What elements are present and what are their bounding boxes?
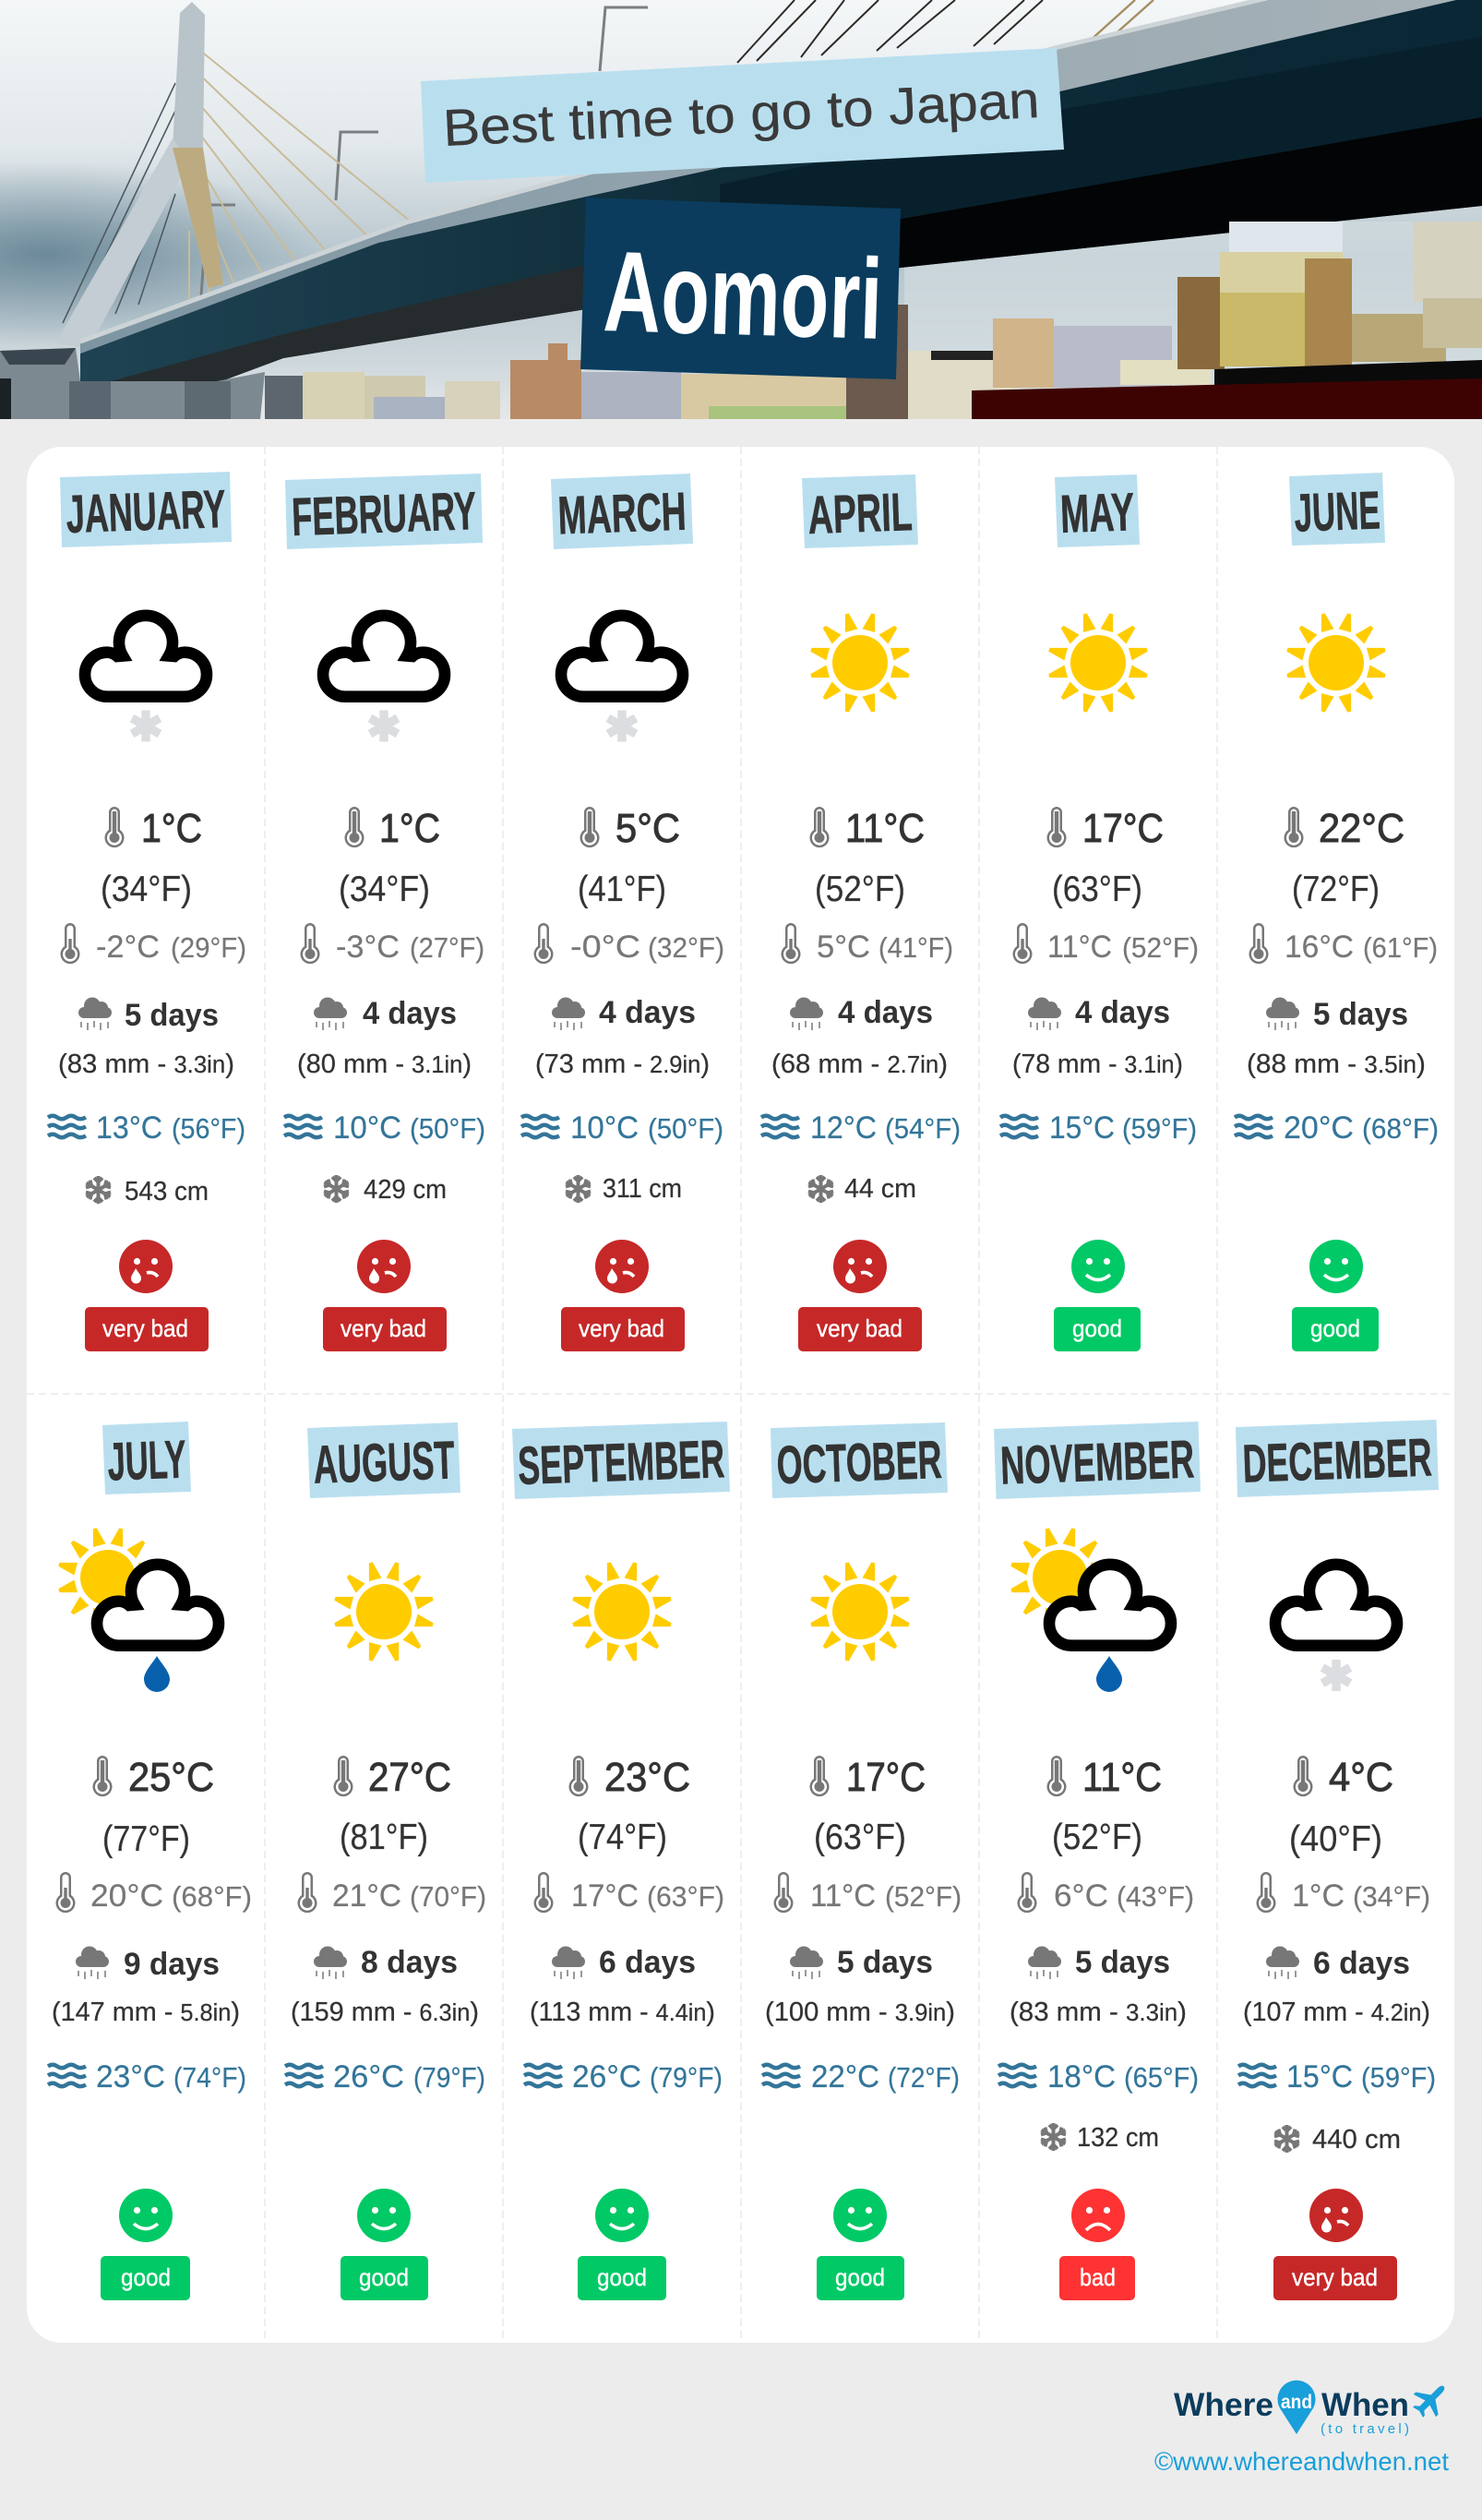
sea temperature (761, 1110, 961, 1146)
average low temperature: 1°C (1292, 1878, 1345, 1914)
sea temperature: (72°F) (888, 2061, 960, 2094)
rainfall: (100 mm - 3.9in) (765, 1998, 955, 2027)
icon: sun (809, 1561, 911, 1662)
sea temperature (284, 1110, 485, 1146)
average low temperature: 11°C (810, 1878, 876, 1914)
heading: July (102, 1422, 191, 1494)
icon: sun (333, 1561, 435, 1662)
average high temperature: (63°F) (1052, 870, 1142, 909)
rainfall (52, 1946, 240, 2027)
city name banner (580, 198, 901, 379)
heading: January (60, 472, 232, 547)
average high temperature: 1°C (379, 806, 440, 851)
heading: May: MAY (1059, 482, 1135, 545)
average high temperature: 11°C (1082, 1755, 1162, 1800)
sea temperature: 10°C (570, 1110, 639, 1146)
average low temperature (533, 923, 724, 965)
sea temperature (1238, 2059, 1436, 2094)
average low temperature (1013, 923, 1199, 965)
average low temperature: -3°C (336, 930, 400, 965)
snowfall (564, 1174, 682, 1204)
sea temperature: (59°F) (1122, 1112, 1197, 1145)
heading: August: AUGUST (312, 1430, 456, 1495)
average high temperature (92, 1755, 214, 1859)
rainfall (1010, 1945, 1187, 2027)
average high temperature (1285, 806, 1404, 909)
rainfall: (113 mm - 4.4in) (530, 1998, 715, 2027)
heading: June: JUNE (1293, 480, 1381, 544)
average high temperature (101, 806, 202, 909)
average low temperature: 21°C (332, 1878, 401, 1914)
rainfall: (80 mm - 3.1in) (297, 1050, 472, 1079)
heading: June (1289, 473, 1385, 546)
average low temperature: (61°F) (1363, 931, 1438, 964)
heading: March (551, 474, 693, 549)
average low temperature: 20°C (90, 1878, 163, 1914)
sea temperature: 23°C (96, 2059, 165, 2094)
average low temperature: (63°F) (647, 1880, 724, 1913)
sea temperature: 20°C (1284, 1110, 1354, 1146)
rainfall: (68 mm - 2.7in) (771, 1050, 948, 1079)
average low temperature: -0°C (570, 930, 640, 965)
rating: very bad: very bad (817, 1314, 902, 1342)
rainfall: (159 mm - 6.3in) (291, 1998, 479, 2027)
snowfall: 429 cm (364, 1175, 447, 1205)
average low temperature: (68°F) (172, 1880, 252, 1913)
icon: cloud with snow (1275, 1565, 1397, 1691)
average low temperature (781, 923, 953, 965)
average high temperature: (77°F) (102, 1819, 190, 1859)
snowfall (1273, 2125, 1401, 2154)
average low temperature: 16°C (1285, 930, 1354, 965)
snowfall: 543 cm (125, 1177, 209, 1206)
rating: good: good (1310, 1314, 1360, 1342)
average high temperature: (63°F) (814, 1818, 906, 1857)
rainfall (771, 995, 948, 1079)
average low temperature: (27°F) (410, 931, 484, 964)
average low temperature (533, 1872, 724, 1914)
rainfall (765, 1945, 955, 2027)
rainfall (530, 1945, 715, 2027)
panel: September (512, 1422, 730, 2300)
heading: September (512, 1422, 730, 1499)
average high temperature: (40°F) (1289, 1819, 1382, 1859)
rating: good: good (121, 2263, 171, 2291)
rainfall: (78 mm - 3.1in) (1012, 1050, 1183, 1079)
rainfall: (73 mm - 2.9in) (535, 1050, 710, 1079)
average high temperature (1289, 1755, 1393, 1859)
average low temperature (301, 923, 484, 965)
average high temperature: (74°F) (578, 1818, 667, 1857)
panel: July (48, 1422, 252, 2300)
icon: map pin with "and": and (1281, 2392, 1312, 2413)
rating: very bad (798, 1240, 922, 1351)
rainfall: 4 days (363, 996, 457, 1031)
sea temperature: (65°F) (1124, 2061, 1199, 2094)
rating: very bad (85, 1240, 209, 1351)
sea temperature (521, 1110, 723, 1146)
rating: very bad: very bad (102, 1314, 188, 1342)
average low temperature (55, 1872, 252, 1914)
icon: airplane (1406, 2375, 1455, 2424)
average high temperature: (81°F) (340, 1818, 428, 1857)
average low temperature: (52°F) (1122, 931, 1199, 964)
average low temperature: (41°F) (878, 931, 953, 964)
rating: good (578, 2189, 666, 2300)
average high temperature (1046, 1755, 1162, 1857)
average low temperature: (52°F) (885, 1880, 962, 1913)
sea temperature: (56°F) (172, 1112, 245, 1145)
panel: April (761, 474, 961, 1351)
average high temperature: (72°F) (1292, 870, 1380, 909)
panel: August (285, 1422, 486, 2300)
average high temperature: (34°F) (101, 870, 192, 909)
panel: February (284, 474, 485, 1351)
rainfall (58, 997, 234, 1079)
average low temperature: (32°F) (648, 931, 724, 964)
average high temperature: 22°C (1319, 806, 1404, 851)
icon: cloud with snow (323, 616, 445, 742)
average low temperature (61, 923, 246, 965)
sea temperature (1235, 1110, 1439, 1146)
rating: very bad: very bad (579, 1314, 664, 1342)
footer logo: Where and When: When (1321, 2387, 1409, 2423)
average high temperature: 1°C (141, 806, 202, 851)
sea temperature: (79°F) (650, 2061, 723, 2094)
panel: December (1236, 1420, 1439, 2300)
icon: map pin with "and" (1277, 2381, 1316, 2434)
rainfall: 5 days (1313, 997, 1408, 1032)
heading: September: SEPTEMBER (517, 1429, 725, 1496)
rating: very bad (561, 1240, 685, 1351)
average low temperature: (29°F) (171, 931, 246, 964)
sea temperature: (74°F) (173, 2061, 246, 2094)
rainfall: 6 days (599, 1945, 696, 1980)
icon: cloud with snow (561, 616, 683, 742)
sea temperature (285, 2059, 485, 2094)
average high temperature: 11°C (845, 806, 925, 851)
header photo: Aomori bay bridge and city (0, 0, 1482, 419)
rating: good: good (359, 2263, 409, 2291)
average high temperature: (41°F) (578, 870, 666, 909)
average high temperature: 17°C (846, 1755, 926, 1800)
icon: sun (1047, 612, 1149, 714)
average high temperature: 4°C (1329, 1755, 1393, 1800)
snowfall (807, 1174, 916, 1204)
rainfall (297, 996, 472, 1079)
rating: very bad: very bad (1292, 2263, 1378, 2291)
rating: bad: bad (1080, 2263, 1116, 2291)
sea temperature: 12°C (810, 1110, 877, 1146)
rainfall (535, 995, 710, 1079)
panel: October (762, 1422, 962, 2300)
heading: November: NOVEMBER (999, 1429, 1195, 1496)
sea temperature (998, 2059, 1199, 2094)
sea temperature (1000, 1110, 1197, 1146)
sea temperature: (54°F) (885, 1112, 961, 1145)
average high temperature (568, 1755, 690, 1857)
average high temperature: 5°C (616, 806, 680, 851)
average high temperature: 17°C (1082, 806, 1164, 851)
average high temperature: (34°F) (339, 870, 430, 909)
sea temperature: 15°C (1286, 2059, 1353, 2094)
title banner (421, 48, 1064, 183)
sea temperature: 15°C (1049, 1110, 1115, 1146)
average low temperature (1257, 1872, 1430, 1914)
panel: November (994, 1422, 1201, 2300)
average low temperature (1249, 923, 1438, 965)
average high temperature: 25°C (128, 1755, 214, 1800)
sea temperature: (59°F) (1361, 2061, 1436, 2094)
average low temperature: 17°C (571, 1878, 639, 1914)
heading: March: MARCH (556, 482, 687, 546)
city name banner: Aomori (602, 228, 884, 364)
rating: very bad (323, 1240, 447, 1351)
panel: monthly weather table (27, 447, 1454, 2343)
sea temperature: 26°C (572, 2059, 641, 2094)
rainfall (291, 1945, 479, 2027)
footer logo: Where and When: Where (1174, 2387, 1273, 2423)
rating: very bad (1273, 2189, 1397, 2300)
sea temperature: 18°C (1047, 2059, 1116, 2094)
rating: good: good (597, 2263, 647, 2291)
snowfall (322, 1175, 447, 1205)
heading: November (994, 1422, 1201, 1499)
rainfall: (83 mm - 3.3in) (58, 1050, 234, 1079)
rating: good (101, 2189, 190, 2300)
icon: sun (571, 1561, 673, 1662)
heading: February (285, 474, 483, 549)
panel: January (48, 472, 246, 1351)
rainfall: 8 days (361, 1945, 458, 1980)
rainfall: (107 mm - 4.2in) (1243, 1998, 1430, 2027)
heading: April: APRIL (807, 482, 914, 546)
rainfall: 5 days (1075, 1945, 1170, 1980)
panel: June (1235, 473, 1439, 1351)
rating: good (341, 2189, 428, 2300)
sea temperature: (79°F) (413, 2061, 485, 2094)
icon: cloud with snow (85, 616, 207, 742)
snowfall: 44 cm (844, 1174, 916, 1204)
sea temperature: 10°C (333, 1110, 401, 1146)
panel: May (1000, 474, 1199, 1351)
sea temperature: 22°C (811, 2059, 879, 2094)
rainfall (1012, 995, 1183, 1079)
sea temperature: (50°F) (648, 1112, 723, 1145)
heading: April (802, 474, 918, 548)
sea temperature: 13°C (96, 1110, 162, 1146)
rainfall: 6 days (1313, 1946, 1410, 1981)
snowfall (84, 1176, 209, 1206)
icon: sun (1285, 612, 1387, 714)
average high temperature: (52°F) (815, 870, 905, 909)
average low temperature: 11°C (1047, 930, 1112, 965)
rainfall: (88 mm - 3.5in) (1247, 1050, 1426, 1079)
sea temperature: (68°F) (1362, 1112, 1439, 1145)
average high temperature (334, 1755, 451, 1857)
panel: March (521, 474, 724, 1351)
rainfall: (147 mm - 5.8in) (52, 1998, 240, 2027)
rating: good (1054, 1240, 1141, 1351)
average low temperature (773, 1872, 962, 1914)
heading: August (307, 1422, 460, 1498)
rainfall: 4 days (1075, 995, 1170, 1030)
average high temperature: 27°C (368, 1755, 451, 1800)
average low temperature: 5°C (817, 930, 870, 965)
rating: good (817, 2189, 904, 2300)
icon: sun (809, 612, 911, 714)
sea temperature (48, 1110, 245, 1146)
average high temperature (339, 806, 440, 909)
average high temperature (578, 806, 680, 909)
average low temperature: -2°C (96, 930, 160, 965)
icon: sun, cloud and rain drop (1010, 1527, 1171, 1692)
average low temperature: 6°C (1054, 1878, 1108, 1914)
rating: bad (1059, 2189, 1135, 2300)
rating: good: good (835, 2263, 885, 2291)
average low temperature: (34°F) (1353, 1880, 1430, 1913)
heading: January: JANUARY (66, 479, 227, 545)
average low temperature: (43°F) (1117, 1880, 1194, 1913)
average high temperature (1046, 806, 1164, 909)
copyright url: ©www.whereandwhen.net (1154, 2447, 1449, 2476)
footer logo: Where and When (1174, 2375, 1455, 2437)
heading: July: JULY (106, 1430, 187, 1492)
average high temperature (810, 1755, 926, 1857)
title banner: Best time to go to Japan (442, 70, 1041, 157)
average low temperature: (70°F) (410, 1880, 486, 1913)
average low temperature (1017, 1872, 1194, 1914)
heading: February: FEBRUARY (291, 481, 477, 547)
sea temperature: 26°C (333, 2059, 404, 2094)
rainfall (1243, 1946, 1430, 2027)
rainfall (1247, 997, 1426, 1079)
sea temperature (524, 2059, 723, 2094)
sea temperature (48, 2059, 246, 2094)
rating: good (1292, 1240, 1379, 1351)
rainfall: 5 days (837, 1945, 933, 1980)
snowfall (1039, 2123, 1159, 2153)
snowfall: 311 cm (603, 1174, 682, 1204)
average high temperature: 23°C (604, 1755, 690, 1800)
heading: October (771, 1422, 948, 1498)
snowfall: 132 cm (1077, 2123, 1159, 2153)
rainfall: 9 days (124, 1947, 220, 1982)
icon: sun, cloud and rain drop (57, 1527, 219, 1692)
rainfall: (83 mm - 3.3in) (1010, 1998, 1187, 2027)
average high temperature: (52°F) (1052, 1818, 1142, 1857)
snowfall: 440 cm (1312, 2125, 1401, 2154)
rainfall: 5 days (125, 998, 219, 1033)
sea temperature (762, 2059, 960, 2094)
heading: May (1055, 474, 1140, 547)
average high temperature (810, 806, 925, 909)
rainfall: 4 days (838, 995, 933, 1030)
sea temperature: (50°F) (410, 1112, 485, 1145)
footer logo: Where and When: (to travel) (1321, 2421, 1409, 2437)
rainfall: 4 days (599, 995, 696, 1030)
rating: good: good (1072, 1314, 1122, 1342)
average low temperature (297, 1872, 486, 1914)
heading: October: OCTOBER (776, 1430, 943, 1495)
rating: very bad: very bad (341, 1314, 426, 1342)
